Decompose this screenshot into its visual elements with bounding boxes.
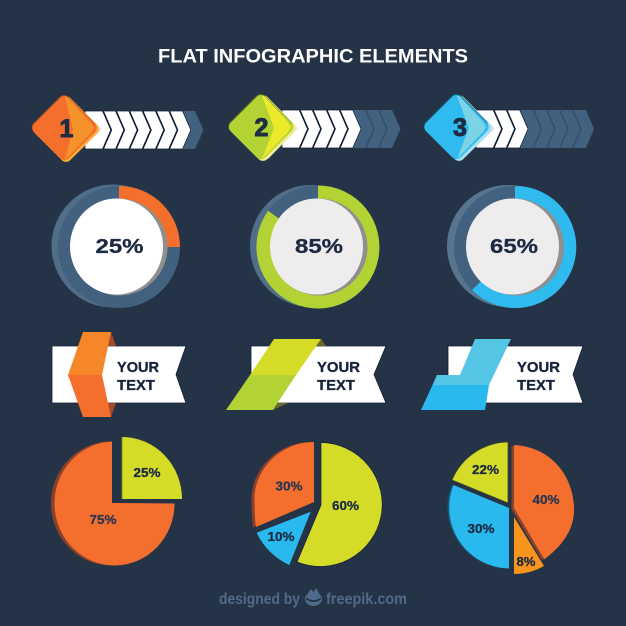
pie chart: 40 / 30 / 22 / 8 [447, 442, 574, 574]
value 65%: 65% [490, 235, 538, 258]
label 75%: 75% [90, 512, 117, 527]
number 2: 2 [255, 114, 268, 142]
ribbon text: YOUR [517, 360, 561, 376]
icon: orange diamond badge [29, 92, 102, 164]
footer credit [219, 588, 407, 608]
ribbon label: green [226, 339, 386, 410]
step arrow 2 [226, 91, 400, 163]
ribbon text: TEXT [317, 378, 355, 394]
footer credit: designed by [219, 591, 300, 608]
title: FLAT INFOGRAPHIC ELEMENTS [158, 46, 468, 68]
footer credit: freepik.com [326, 591, 407, 608]
pie chart: 60 / 30 / 10 [251, 442, 382, 566]
label 8%: 8% [516, 554, 536, 569]
ribbon text: TEXT [117, 378, 155, 394]
label 30%: 30% [468, 521, 495, 536]
label 25%: 25% [134, 465, 161, 480]
donut chart: 85% [250, 185, 380, 308]
chevron progress track 2 [282, 110, 400, 148]
icon: blue diamond badge [421, 91, 495, 163]
donut chart: 25% [52, 184, 180, 308]
ribbon text [517, 360, 561, 394]
number 1: 1 [60, 115, 74, 143]
ribbon text: YOUR [317, 360, 361, 376]
ribbon text [117, 360, 160, 394]
chevron progress track 3 [476, 110, 594, 148]
value 85%: 85% [295, 235, 343, 258]
ribbon text: YOUR [117, 360, 160, 376]
chevron progress track 1 [85, 111, 204, 149]
number 3: 3 [453, 114, 467, 142]
label 30%: 30% [276, 478, 303, 494]
ribbon text [317, 360, 361, 394]
step arrow 1 [29, 92, 203, 164]
icon: freepik mascot [305, 588, 322, 606]
icon: green diamond badge [226, 91, 298, 163]
ribbon label: orange [52, 332, 186, 417]
pie chart: 75 / 25 [51, 437, 182, 565]
step arrow 3 [421, 91, 594, 163]
value 25%: 25% [96, 235, 144, 258]
label 22%: 22% [472, 462, 499, 477]
label 40%: 40% [532, 492, 560, 507]
label 10%: 10% [268, 529, 295, 544]
label 60%: 60% [332, 498, 359, 513]
ribbon text: TEXT [517, 378, 555, 394]
ribbon label: blue [421, 339, 583, 410]
donut chart: 65% [447, 185, 576, 308]
